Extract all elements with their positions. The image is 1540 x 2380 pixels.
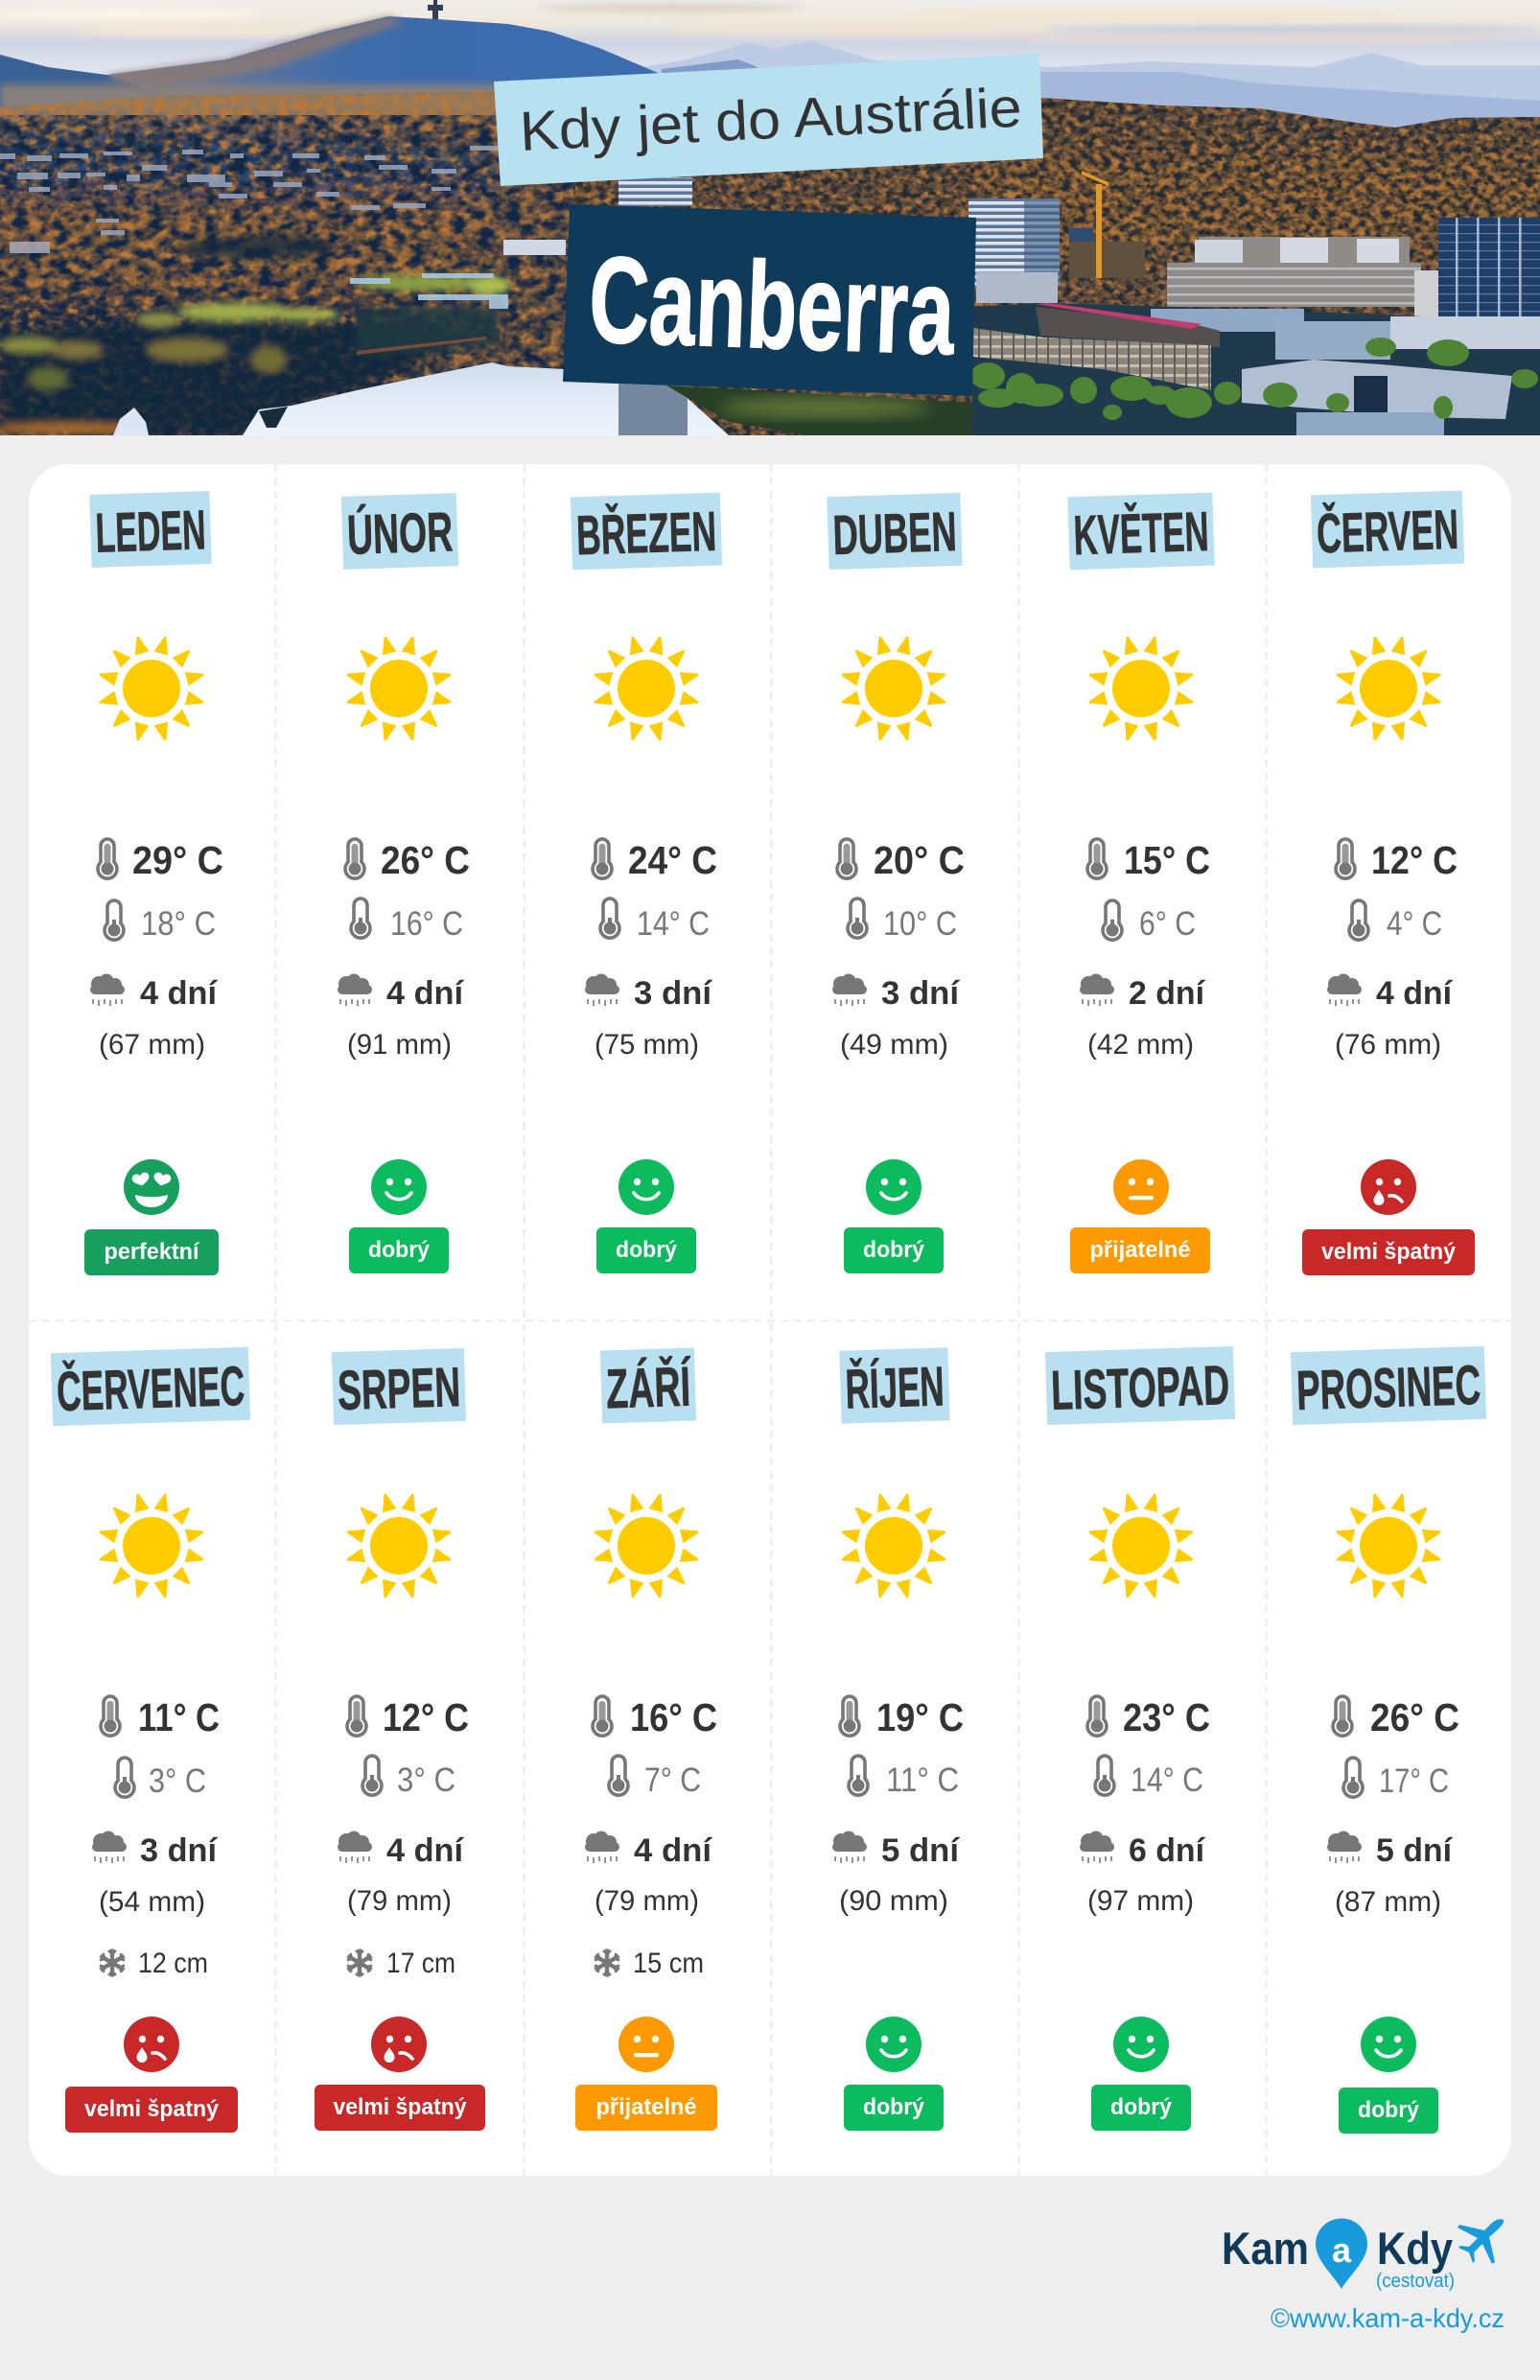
icon: sun (840, 635, 947, 742)
high temperature: 29° C (132, 838, 223, 882)
rainy days: 3 dní (881, 975, 961, 1012)
month: Únor (338, 493, 470, 1273)
rainy days: 4 dní (1376, 975, 1454, 1012)
precipitation: (42 mm) (1087, 1029, 1194, 1061)
rating label (596, 1227, 696, 1273)
shoreline (357, 337, 486, 355)
rating label (1070, 1227, 1210, 1273)
rainy days (832, 1832, 961, 1869)
precipitation: (49 mm) (840, 1029, 948, 1061)
low temperature (105, 900, 216, 943)
high temperature: 11° C (138, 1695, 220, 1739)
rating label: dobrý (1358, 2097, 1420, 2123)
precipitation: (90 mm) (839, 1885, 948, 1917)
icon: rating face (371, 1159, 427, 1215)
icon: rating face (1361, 2017, 1416, 2072)
month heading: Červenec: ČERVENEC (56, 1355, 245, 1423)
icon: rating face (124, 1159, 179, 1215)
month: Duben (827, 493, 965, 1273)
month heading: Květen: KVĚTEN (1073, 501, 1210, 567)
low temperature: 3° C (397, 1762, 455, 1799)
high temperature (837, 838, 965, 882)
icon: location pin (1316, 2219, 1367, 2289)
rating label: perfektní (104, 1239, 200, 1265)
low temperature (351, 898, 463, 943)
snowfall: 15 cm (633, 1948, 704, 1979)
month heading: Únor (341, 493, 458, 570)
rating label (1091, 2085, 1191, 2131)
low temperature: 4° C (1387, 905, 1442, 943)
rating label: dobrý (863, 1237, 925, 1263)
crane (1082, 171, 1108, 278)
precipitation: (79 mm) (347, 1885, 452, 1917)
icon: sun (345, 1492, 453, 1599)
low temperature (1103, 900, 1196, 943)
month heading: Duben: DUBEN (832, 501, 958, 567)
month heading: Duben (827, 493, 963, 570)
month: Leden (84, 491, 223, 1275)
month heading: Březen (571, 493, 722, 570)
header photo: Canberra landscape (0, 0, 1540, 441)
precipitation: (79 mm) (595, 1885, 699, 1917)
rainy days: 2 dní (1129, 975, 1206, 1012)
rating label (65, 2087, 238, 2133)
month: Září (575, 1347, 717, 2131)
month: Květen (1067, 493, 1215, 1273)
month heading: Srpen (332, 1348, 466, 1425)
icon: sun (840, 1492, 947, 1599)
high temperature: 16° C (630, 1695, 717, 1739)
title: Canberra (563, 204, 976, 396)
city buildings (968, 171, 1540, 435)
month heading: Září (600, 1347, 696, 1424)
high temperature (347, 1695, 469, 1739)
icon: airplane (1458, 2219, 1504, 2264)
icon: sun (1335, 635, 1442, 742)
low temperature: 14° C (1131, 1762, 1203, 1799)
month heading: Leden: LEDEN (95, 499, 207, 565)
precipitation: (76 mm) (1335, 1029, 1441, 1061)
website credit: ©www.kam-a-kdy.cz (1271, 2303, 1505, 2333)
icon: sun (593, 635, 700, 742)
icon: sun (1087, 635, 1195, 742)
rainy days (338, 974, 465, 1012)
icon: rating face (866, 2017, 922, 2072)
snowfall (100, 1948, 208, 1979)
high temperature: 26° C (381, 838, 470, 882)
high temperature (98, 838, 223, 882)
rating label (1339, 2088, 1438, 2134)
high temperature (840, 1695, 964, 1739)
rainy days (90, 974, 219, 1012)
high temperature (1087, 1695, 1210, 1739)
rainy days (1327, 1832, 1454, 1869)
rainy days (832, 974, 961, 1012)
month: Srpen (315, 1348, 485, 2131)
rainy days (1080, 1832, 1206, 1869)
icon: rating face (618, 2017, 674, 2072)
rating label: velmi špatný (84, 2096, 220, 2122)
high temperature (101, 1695, 220, 1739)
tower on the hill (428, 0, 443, 21)
rating label (84, 1229, 219, 1275)
panel: monthly climate table (29, 464, 1511, 2176)
rainy days: 4 dní (386, 975, 465, 1012)
high temperature (1336, 838, 1458, 882)
icon: sun (593, 1492, 700, 1599)
title: Kdy jet do Austrálie (494, 54, 1043, 186)
snowfall: 12 cm (138, 1948, 208, 1979)
title: Canberra: Canberra (587, 231, 957, 381)
low temperature (609, 1756, 701, 1799)
logo: Kam a Kdy (1222, 2219, 1504, 2292)
icon: rating face (371, 2017, 427, 2072)
low temperature (115, 1758, 206, 1800)
high temperature: 15° C (1124, 838, 1210, 882)
rainy days: 4 dní (140, 975, 219, 1012)
month heading: Listopad: LISTOPAD (1050, 1354, 1230, 1422)
month: Červenec (51, 1347, 250, 2133)
low temperature (848, 898, 957, 943)
icon: sun (1087, 1492, 1195, 1599)
month heading: Říjen (839, 1347, 950, 1424)
icon: sun (345, 635, 453, 742)
rainy days: 3 dní (634, 975, 713, 1012)
rainy days (92, 1832, 219, 1869)
low temperature: 3° C (149, 1762, 206, 1800)
high temperature (593, 838, 717, 882)
rainy days: 4 dní (386, 1832, 465, 1869)
high temperature (1087, 838, 1210, 882)
high temperature: 23° C (1123, 1695, 1210, 1739)
low temperature (849, 1756, 959, 1799)
precipitation: (75 mm) (595, 1029, 699, 1061)
icon: rating face (618, 1159, 674, 1215)
low temperature: 17° C (1379, 1762, 1449, 1800)
high temperature (593, 1695, 717, 1739)
rainy days (1327, 974, 1454, 1012)
month heading: Srpen: SRPEN (337, 1356, 461, 1422)
month: Listopad (1045, 1346, 1235, 2131)
icon: sun (98, 1492, 205, 1599)
precipitation: (91 mm) (347, 1029, 452, 1061)
high temperature: 12° C (383, 1695, 469, 1739)
precipitation: (97 mm) (1087, 1885, 1194, 1917)
low temperature: 11° C (886, 1762, 959, 1799)
low temperature: 18° C (141, 905, 216, 943)
month: Březen (571, 493, 722, 1273)
title: Kdy jet do Austrálie: Kdy jet do Austrálie (518, 76, 1023, 163)
rainy days: 5 dní (1376, 1832, 1454, 1869)
high temperature: 20° C (874, 838, 965, 882)
rainy days (585, 1832, 713, 1869)
rating label (1302, 1229, 1475, 1275)
rainy days: 5 dní (881, 1832, 961, 1869)
low temperature: 16° C (390, 905, 463, 943)
rating label: přijatelné (1089, 1237, 1191, 1263)
month: Říjen (832, 1347, 964, 2131)
month heading: Březen: BŘEZEN (575, 501, 717, 567)
month: Červen (1302, 491, 1475, 1275)
tower reflection (618, 384, 688, 435)
building behind title (618, 177, 692, 206)
rating label: přijatelné (596, 2094, 696, 2120)
logo: Kam a Kdy: (cestovat) (1376, 2271, 1455, 2292)
month heading: Červen (1311, 491, 1464, 568)
rating label: dobrý (368, 1237, 431, 1263)
low temperature (1343, 1758, 1449, 1800)
month heading: Únor: ÚNOR (346, 501, 454, 567)
month heading: Listopad (1045, 1346, 1235, 1425)
rainy days (585, 974, 713, 1012)
rating label (349, 1227, 449, 1273)
month heading: Leden (89, 491, 212, 568)
rating label (844, 1227, 944, 1273)
logo: Kam a Kdy: Kam (1222, 2223, 1309, 2274)
snowfall (347, 1948, 455, 1979)
icon: rating face (1113, 1159, 1169, 1215)
icon: sun (98, 635, 205, 742)
rating label (844, 2085, 944, 2131)
high temperature (1333, 1695, 1459, 1739)
precipitation: (67 mm) (99, 1029, 205, 1061)
low temperature: 10° C (883, 905, 957, 943)
month heading: Září: ZÁŘÍ (605, 1356, 692, 1420)
rating label (575, 2085, 717, 2131)
rainy days (338, 1832, 465, 1869)
low temperature: 6° C (1139, 905, 1196, 943)
low temperature (600, 898, 710, 943)
precipitation: (54 mm) (99, 1886, 205, 1918)
rainy days: 6 dní (1129, 1832, 1206, 1869)
low temperature (1349, 900, 1442, 943)
logo: Kam a Kdy: Kdy (1377, 2223, 1453, 2274)
high temperature: 19° C (876, 1695, 964, 1739)
pale roofs near the lake (350, 273, 508, 309)
high temperature: 12° C (1371, 838, 1458, 882)
rating label: velmi špatný (334, 2094, 467, 2120)
month heading: Červenec (51, 1347, 250, 1426)
hillside houses (0, 146, 499, 253)
icon: rating face (1361, 1159, 1416, 1215)
low temperature (362, 1756, 455, 1799)
high temperature: 24° C (628, 838, 717, 882)
rainy days (1080, 974, 1206, 1012)
low temperature (1095, 1756, 1203, 1799)
snowfall: 17 cm (386, 1948, 455, 1979)
icon: rating face (1113, 2017, 1169, 2072)
rating label (315, 2085, 485, 2131)
high temperature: 26° C (1370, 1695, 1459, 1739)
rating label: velmi špatný (1321, 1239, 1457, 1265)
rainy days: 4 dní (634, 1832, 713, 1869)
forest base (0, 92, 1540, 435)
low temperature: 7° C (644, 1762, 701, 1799)
logo: Kam a Kdy: a (1332, 2230, 1352, 2270)
month heading: Říjen: ŘÍJEN (845, 1355, 945, 1421)
lake (243, 362, 729, 435)
rating label: dobrý (1110, 2094, 1173, 2120)
snowfall (595, 1948, 704, 1979)
rainy days: 3 dní (140, 1832, 219, 1869)
rating label: dobrý (616, 1237, 678, 1263)
icon: rating face (866, 1159, 922, 1215)
icon: rating face (124, 2017, 179, 2072)
precipitation: (87 mm) (1335, 1886, 1441, 1918)
high temperature (345, 838, 470, 882)
month heading: Květen (1067, 493, 1215, 570)
rating label: dobrý (863, 2094, 925, 2120)
low temperature: 14° C (637, 905, 710, 943)
month: Prosinec (1291, 1346, 1486, 2134)
icon: sun (1335, 1492, 1442, 1599)
